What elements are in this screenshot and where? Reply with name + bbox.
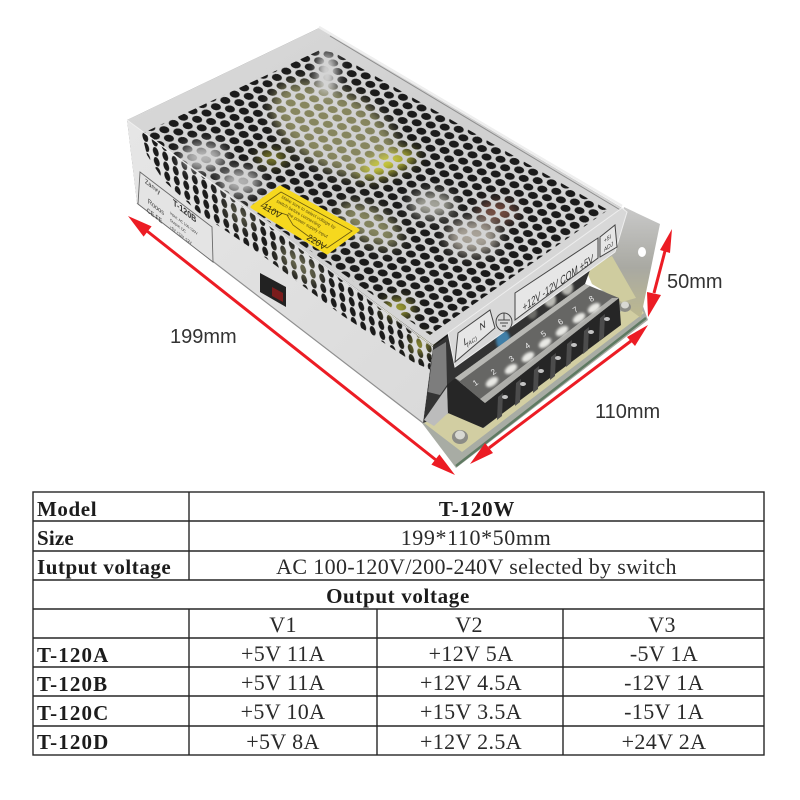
interior behind terminal xyxy=(423,225,622,423)
interior capacitors xyxy=(527,281,573,319)
side spec label: Input: AC 100-120V xyxy=(170,210,198,236)
dimension arrow: 199mm length xyxy=(128,216,455,475)
terminal body xyxy=(447,298,621,428)
terminal connectors xyxy=(502,317,610,399)
row: column headers: V1 xyxy=(269,612,297,637)
sticker text: switch before connecting xyxy=(276,199,322,228)
row: T-120D: +5V 8A xyxy=(246,729,320,754)
bottom lip of side face xyxy=(137,203,423,423)
interior capacitor detail xyxy=(496,330,510,350)
sticker text: the power supply input xyxy=(286,212,329,239)
base plate xyxy=(422,290,648,468)
band box: adjust: +5I xyxy=(604,234,611,245)
row: T-120A xyxy=(37,641,698,667)
row: T-120A: T-120A xyxy=(37,643,109,667)
terminal numbers xyxy=(471,294,596,388)
side face xyxy=(127,120,433,423)
side spec label: Rooos xyxy=(148,198,164,218)
band box: L N AC: N xyxy=(479,319,486,334)
screw highlights xyxy=(484,301,602,389)
side switch window xyxy=(260,273,286,307)
terminal block xyxy=(447,284,621,428)
specification table xyxy=(33,492,764,755)
rear circuit board xyxy=(586,256,636,302)
top edge shadow line xyxy=(330,36,622,211)
row: model xyxy=(37,497,515,521)
row: T-120B: -12V 1A xyxy=(624,670,704,695)
terminal numbers: 8 xyxy=(587,294,596,304)
row: output voltage heading: Output voltage xyxy=(326,584,470,608)
terminal numbers: 6 xyxy=(556,317,565,327)
row: T-120A: +5V 11A xyxy=(241,641,325,666)
row: size xyxy=(37,525,551,550)
cover lower ridge xyxy=(480,298,619,403)
side spec label: Zanvy xyxy=(145,178,160,197)
row: input voltage: Iutput voltage xyxy=(37,555,171,579)
front terminal label band xyxy=(448,208,627,367)
row: T-120C: +15V 3.5A xyxy=(420,699,522,724)
terminal numbers: 2 xyxy=(489,367,498,377)
terminal numbers: 1 xyxy=(471,378,480,388)
row: T-120B: +5V 11A xyxy=(241,670,325,695)
row: column headers: V2 xyxy=(455,612,483,637)
band box: L N AC: (AC) xyxy=(467,336,477,349)
row: T-120C: +5V 10A xyxy=(241,699,325,724)
row: T-120C: T-120C xyxy=(37,701,109,725)
right mounting flange xyxy=(585,207,660,318)
terminal numbers: 4 xyxy=(523,341,532,351)
row: T-120D: T-120D xyxy=(37,730,109,754)
top face xyxy=(127,28,622,345)
row: input voltage xyxy=(37,554,677,579)
side spec label: +5V +12V -12V xyxy=(170,224,192,246)
see-through interior under perforations xyxy=(127,28,622,423)
row: input voltage: AC 100-120V/200-240V selected by switch xyxy=(276,554,677,579)
lower silver bracket xyxy=(424,387,448,426)
band box: output terminals xyxy=(515,238,598,320)
dimension arrow: 50mm height xyxy=(647,229,672,317)
row: model: Model xyxy=(37,497,97,521)
side spec label: CE FE xyxy=(147,207,163,226)
interior silver bracket xyxy=(428,342,447,395)
side spec label: Output: DC xyxy=(170,217,186,234)
product photo: power supply xyxy=(127,27,660,468)
row: T-120B: +12V 4.5A xyxy=(420,670,522,695)
row: T-120D: +24V 2A xyxy=(622,729,706,754)
terminal numbers: 7 xyxy=(571,305,580,315)
yellow voltage warning sticker xyxy=(252,187,358,253)
mounting screw back xyxy=(619,302,631,312)
row: T-120D: +12V 2.5A xyxy=(420,729,522,754)
corner fold edge xyxy=(127,120,433,346)
sticker: 220V: 220V xyxy=(305,232,328,252)
clear terminal cover xyxy=(455,284,619,403)
band box: L N AC: L xyxy=(463,335,469,349)
band box: L N AC xyxy=(455,310,495,362)
top edge fold highlight xyxy=(319,27,622,206)
row: T-120A: +12V 5A xyxy=(429,641,513,666)
row: size: 199*110*50mm xyxy=(401,525,551,550)
terminal numbers: 5 xyxy=(539,329,548,339)
row: size: Size xyxy=(37,526,74,550)
row: T-120B xyxy=(37,670,704,696)
row: T-120D xyxy=(37,729,706,754)
terminal slots xyxy=(497,314,605,420)
side spec label xyxy=(138,172,213,262)
circuit board strip xyxy=(424,303,644,452)
row: T-120C: -15V 1A xyxy=(624,699,704,724)
row: model: T-120W xyxy=(439,497,515,521)
row: T-120A: -5V 1A xyxy=(630,641,698,666)
band box: adjust xyxy=(600,225,617,257)
mounting screw front xyxy=(452,430,468,444)
row: T-120B: T-120B xyxy=(37,672,108,696)
row: T-120C xyxy=(37,699,704,725)
band icon: ground symbol xyxy=(496,313,512,331)
side spec label: T-120B xyxy=(173,197,197,225)
label: 50mm: 50mm xyxy=(667,271,723,293)
label: 110mm: 110mm xyxy=(595,401,660,423)
terminal numbers: 3 xyxy=(507,354,516,364)
band box: output terminals: +12V -12V COM +5V xyxy=(522,251,594,315)
row: column headers xyxy=(269,612,676,637)
band box: adjust: ADJ xyxy=(604,241,613,254)
sticker: 110V: 110V xyxy=(261,201,284,220)
cover ridge xyxy=(455,284,590,381)
row: column headers: V3 xyxy=(648,612,676,637)
table grid xyxy=(33,492,764,755)
sticker text: Make sure to select voltage by xyxy=(280,195,337,230)
flange hole xyxy=(638,247,646,257)
board edge xyxy=(456,318,646,466)
label: 199mm: 199mm xyxy=(170,326,237,348)
dimension arrow: 110mm width xyxy=(470,325,648,464)
